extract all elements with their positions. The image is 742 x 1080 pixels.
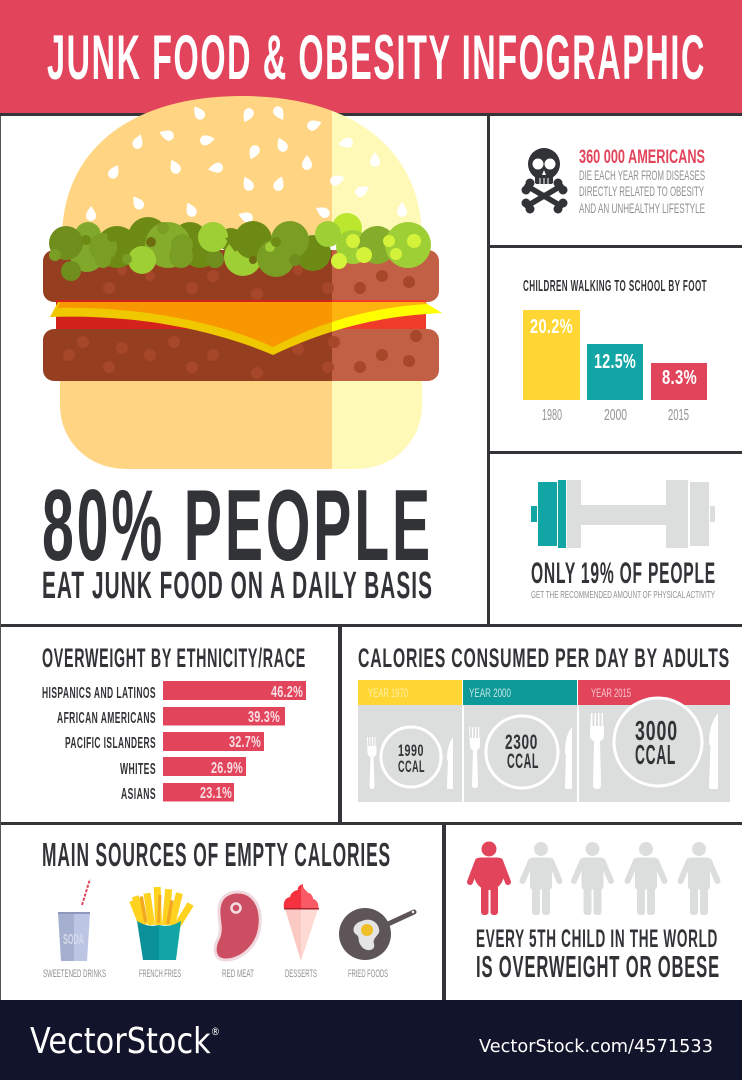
icon captions: FRENCH FRIES [139,968,181,980]
bar chart: 1980 [542,407,562,424]
horizontal bar chart: 26.9% [211,760,243,777]
icon: frying pan with egg [339,908,414,960]
icon captions: FRIED FOODS [348,968,388,980]
watermark id: VectorStock.com/4571533 [479,1036,713,1057]
child obesity statement [476,925,720,984]
footer bar [0,1000,742,1080]
horizontal bar chart: AFRICAN AMERICANS [57,710,156,727]
top bun [62,96,332,235]
icon: dessert cone [284,884,319,961]
bar chart: 2000 [604,407,627,424]
horizontal bar chart [42,681,306,803]
icon: soda cup: SODA [63,931,84,948]
bar chart: 20.2% [530,316,573,338]
patty spots [63,265,422,379]
bottom patty [43,329,332,381]
horizontal bar chart: 39.3% [248,709,280,726]
horizontal bar chart: PACIFIC ISLANDERS [65,735,156,752]
heading: OVERWEIGHT BY ETHNICITY/RACE [42,643,306,673]
watermark logo: ® [211,1025,220,1038]
column 1970: YEAR 1970 [368,686,408,700]
column 1970: CCAL [398,757,425,776]
icon: french fries [129,887,194,960]
column 2000: 2300 [505,731,538,754]
column 2015: 3000 [635,715,678,746]
lettuce [49,213,431,281]
watermark logo: VectorStock [30,1021,244,1062]
panel: physical activity [531,480,716,601]
icon captions: SWEETENED DRINKS [43,968,106,980]
icon: children (grey) [522,842,718,915]
icon: dumbbell [531,480,715,548]
panel: mortality [522,147,705,216]
column 1970 [358,680,462,802]
icon: red meat [215,892,260,960]
horizontal bar chart: 46.2% [271,684,303,701]
headline: 80% people [42,470,433,607]
panel: empty calories [42,836,414,980]
bar chart: 8.3% [662,367,697,389]
headline: 80% people: 80% PEOPLE [42,470,433,582]
top patty [43,250,332,302]
icon: soda cup [58,879,90,961]
column 2015 [578,680,730,802]
heading: MAIN SOURCES OF EMPTY CALORIES [42,836,391,873]
tomato [56,300,332,329]
icon captions: RED MEAT [222,968,254,980]
icon: overweight child (red) [470,842,508,915]
bar chart: 2015 [668,407,689,424]
horizontal bar chart: 32.7% [229,734,261,751]
icon: skull and crossbones [522,148,568,214]
horizontal bar chart: 23.1% [200,785,232,802]
horizontal bar chart: ASIANS [121,786,156,803]
icon captions: DESSERTS [285,968,317,980]
column 2000: YEAR 2000 [469,686,511,700]
icon captions [43,968,388,980]
column 2015: CCAL [635,739,676,770]
mortality text [579,147,705,216]
bar chart: 12.5% [594,351,636,373]
column 2000: CCAL [507,750,539,773]
horizontal bar chart: HISPANICS AND LATINOS [42,685,156,702]
cheese [50,302,332,355]
sub headline: EAT JUNK FOOD ON A DAILY BASIS [42,565,433,607]
bottom bun [60,381,332,469]
header banner [0,0,742,116]
bar chart [523,310,707,424]
sesame seeds [86,104,407,224]
column 1970: 1990 [398,741,424,760]
column 2000 [463,680,577,802]
horizontal bar chart: WHITES [120,761,156,778]
icon: burger illustration [43,96,442,469]
panel: overweight by ethnicity [42,643,306,803]
panel: calories per day [358,643,730,802]
panel: children walking to school [523,278,707,424]
column 2015: YEAR 2015 [591,686,631,700]
panel: child obesity [470,842,720,984]
